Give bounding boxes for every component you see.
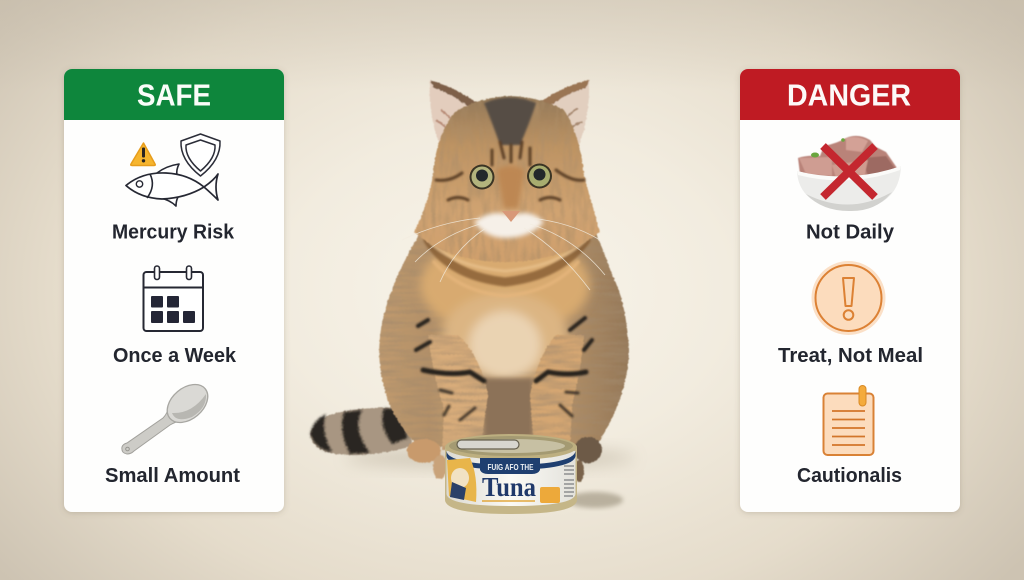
label: once a week: Once a Week [113, 345, 237, 367]
body stripes [416, 318, 592, 420]
chest fur [420, 235, 590, 379]
front legs [428, 335, 584, 450]
icon: spoon [122, 377, 215, 454]
cat muzzle [474, 213, 544, 238]
cat nose bridge [497, 166, 524, 208]
icon: notepad [824, 386, 874, 455]
cat tail [310, 408, 412, 455]
forehead markings [436, 98, 584, 200]
whiskers [402, 218, 605, 290]
panel: safe [64, 69, 284, 512]
icon: calendar [144, 266, 203, 331]
tuna can [445, 434, 623, 514]
safe header [64, 69, 284, 120]
can title: Tuna [482, 472, 536, 502]
cat body [379, 225, 629, 447]
label: not daily: Not Daily [806, 222, 895, 244]
label: mercury risk: Mercury Risk [112, 222, 235, 244]
can shadow [567, 492, 623, 508]
can badge [540, 487, 560, 503]
paws [407, 437, 602, 482]
icon: exclamation circle [812, 261, 886, 335]
belly between legs [482, 378, 533, 438]
cat ears [430, 80, 589, 150]
safe header: SAFE [137, 78, 211, 112]
cat illustration [310, 80, 635, 482]
panel: danger [740, 69, 960, 512]
cat head [414, 96, 600, 262]
cat nose [502, 211, 520, 222]
can fine print [564, 466, 574, 496]
can underline [482, 500, 535, 502]
can brand tab [480, 458, 540, 474]
can lid [445, 434, 577, 460]
icon: tuna bowl crossed out [797, 136, 901, 211]
icon: fish with warning and shield [126, 134, 220, 206]
label: cautionalis: Cautionalis [797, 465, 902, 487]
can body [445, 447, 577, 514]
danger header [740, 69, 960, 120]
cat eyes [470, 164, 552, 190]
can brand tab: FUIG AFO THE [488, 462, 534, 472]
label: treat, not meal: Treat, Not Meal [778, 345, 923, 367]
label: small amount: Small Amount [105, 465, 240, 487]
cat shadow [345, 447, 635, 469]
can mascot [447, 458, 476, 502]
neck bands [422, 232, 592, 296]
danger header: DANGER [787, 78, 911, 112]
